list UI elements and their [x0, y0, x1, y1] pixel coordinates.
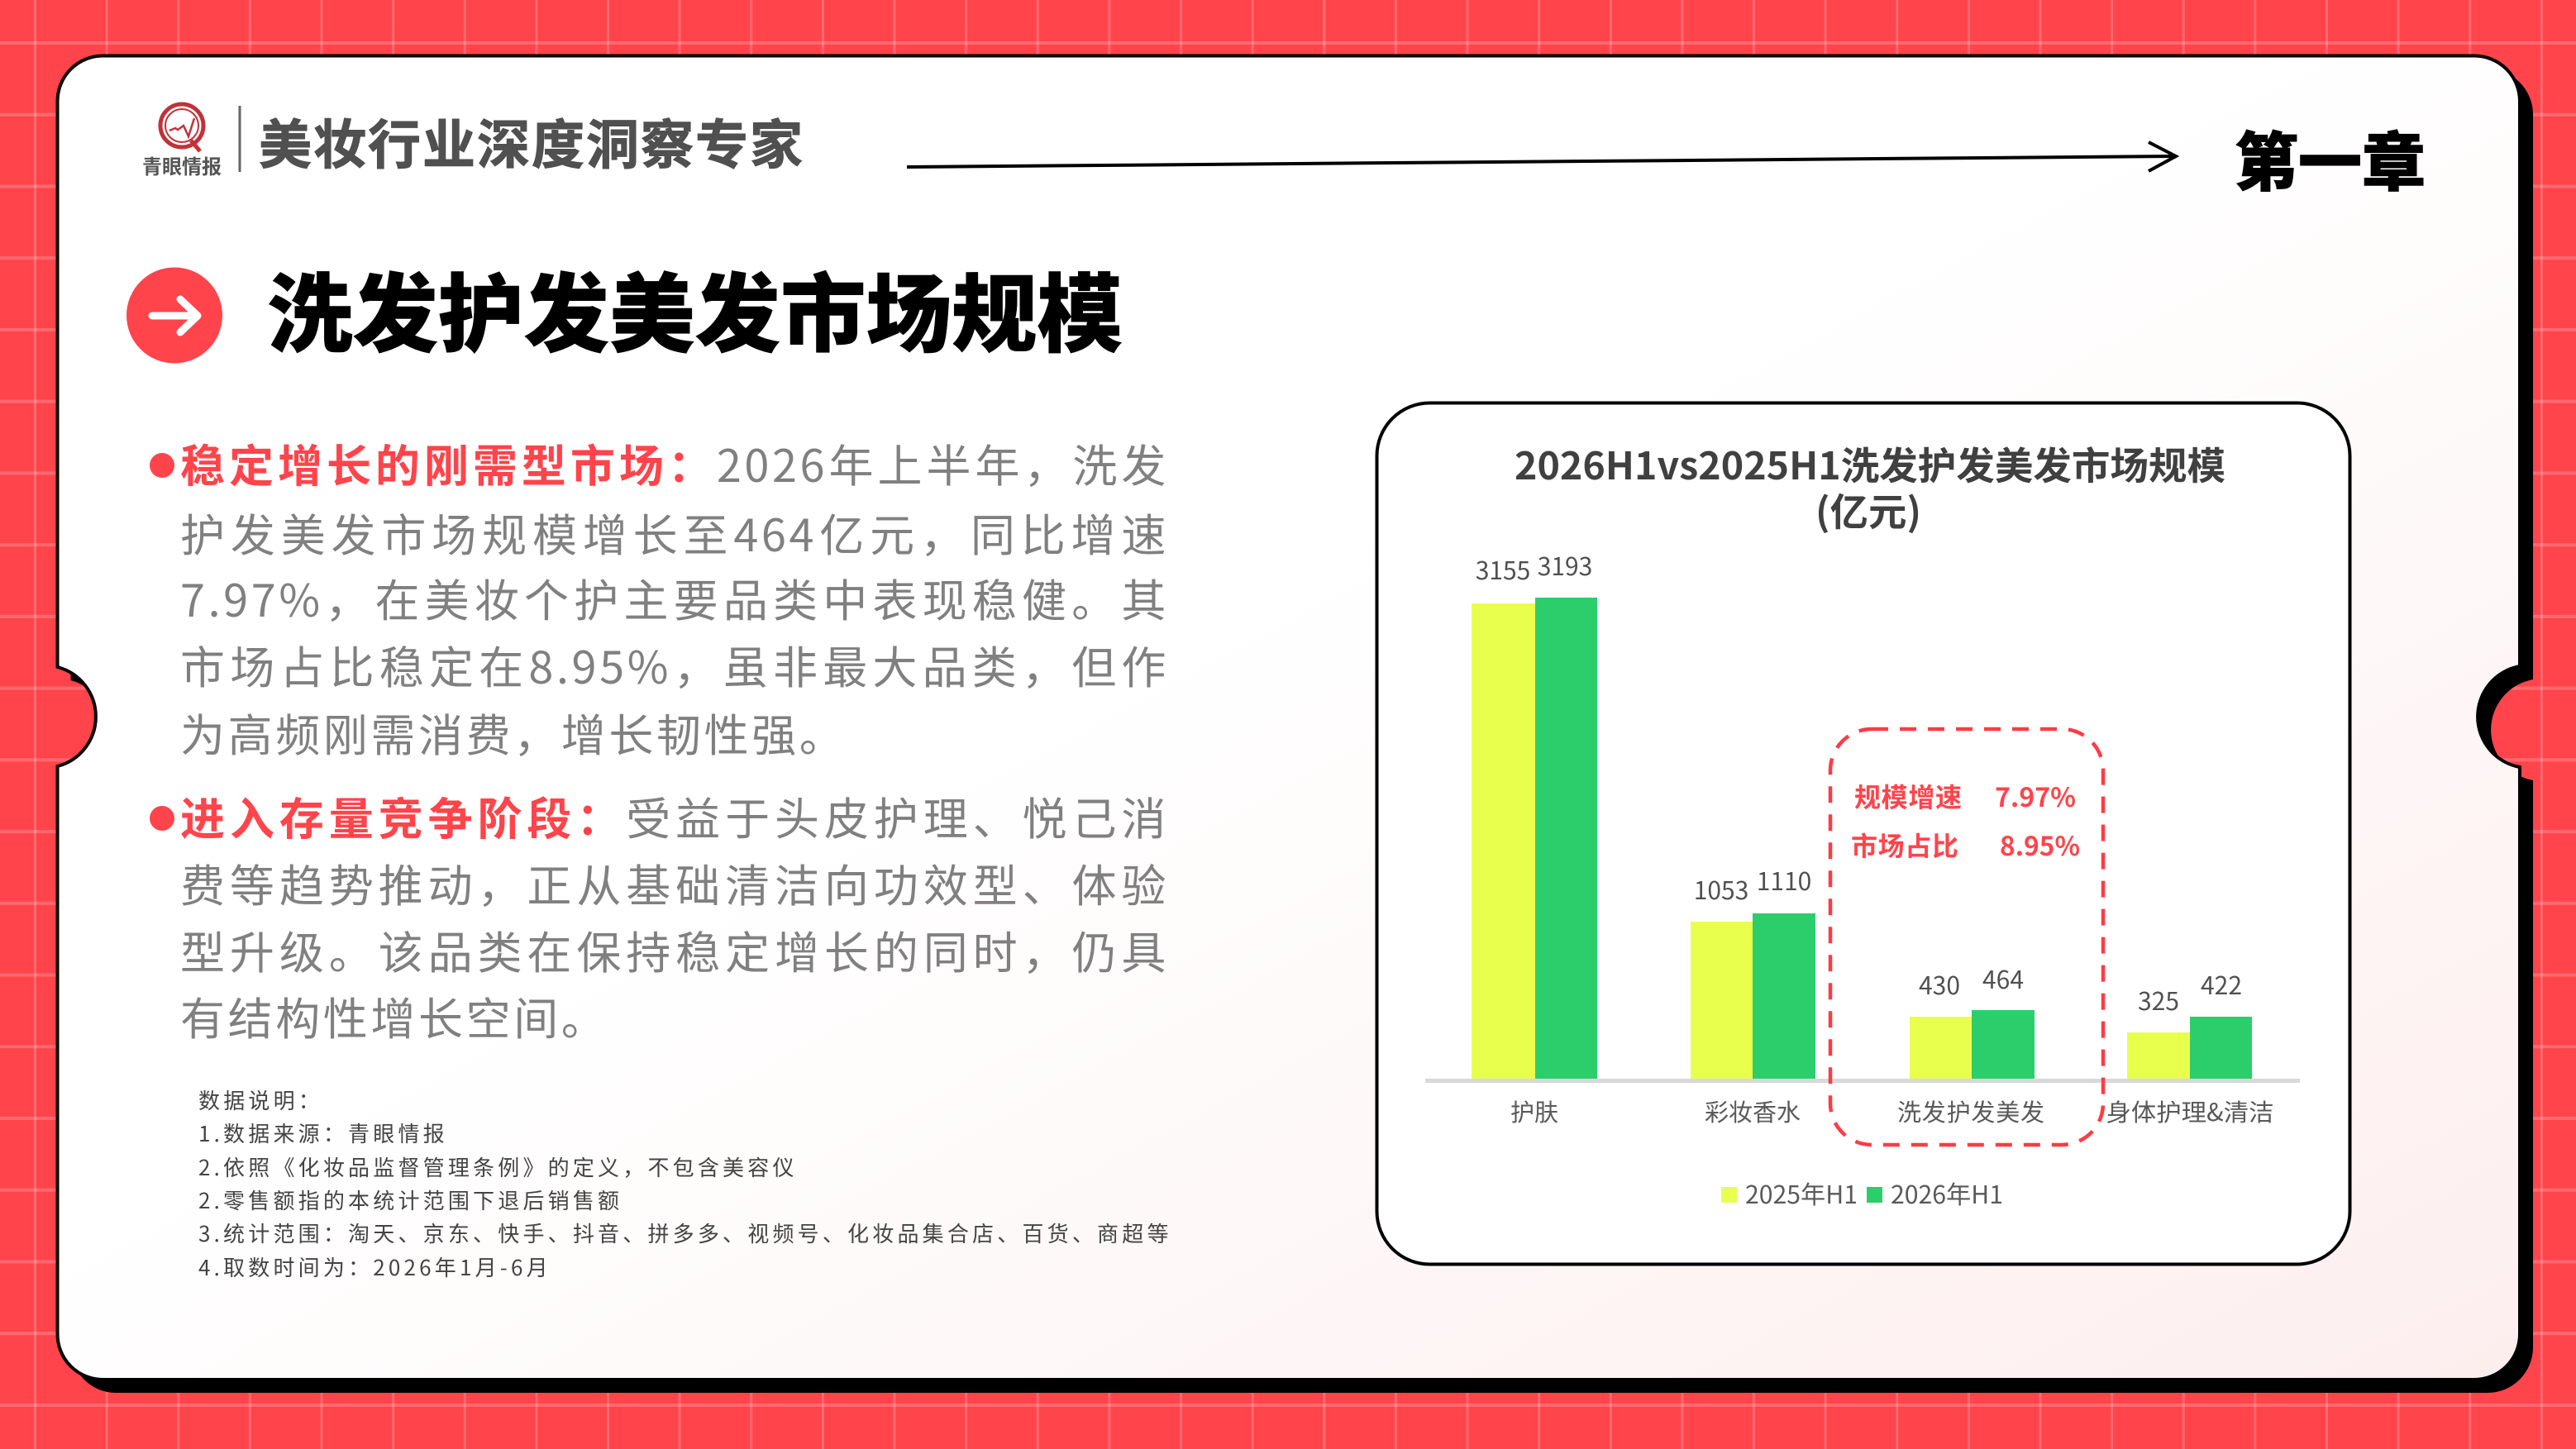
bar chart: [1425, 598, 2300, 1083]
data notes: 数据说明：: [198, 1084, 323, 1115]
bullet: paragraph 2: [150, 806, 174, 831]
callout: highlighted category: 市场占比: [1851, 826, 1958, 864]
chart title: 2026H1vs2025H1洗发护发美发市场规模: [1515, 436, 2225, 491]
chart title: [1515, 436, 2225, 537]
text block: paragraph 1: 为高频刚需消费，增长韧性强。: [180, 699, 847, 765]
data labels: 1110: [1757, 861, 1811, 898]
title: 洗发护发美发市场规模: [267, 245, 1123, 369]
text block: paragraph 2: [180, 783, 1169, 1048]
logo: 青眼情报: [142, 150, 222, 179]
callout: highlighted category: 7.97%: [1995, 777, 2076, 815]
data labels: 3155: [1476, 551, 1530, 587]
data notes: [198, 1084, 1172, 1282]
data notes: 2.依照《化妆品监督管理条例》的定义，不包含美容仪: [198, 1151, 798, 1182]
callout: highlighted category: 8.95%: [2000, 826, 2080, 864]
text block: paragraph 1: 护发美发市场规模增长至464亿元，同比增速: [180, 499, 1169, 565]
data notes: 3.统计范围：淘天、京东、快手、抖音、拼多多、视频号、化妆品集合店、百货、商超等: [198, 1218, 1172, 1248]
chart panel frame: [1377, 403, 2349, 1265]
data labels: 464: [1982, 960, 2024, 996]
chapter label: 第一章: [2235, 112, 2426, 204]
header tagline: 美妆行业深度洞察专家: [259, 103, 804, 179]
data labels: 422: [2201, 965, 2242, 1002]
data labels: 325: [2138, 981, 2179, 1018]
text block: paragraph 1: 稳定增长的刚需型市场：2026年上半年，洗发: [180, 430, 1169, 495]
category labels: 身体护理&清洁: [2106, 1094, 2273, 1128]
data notes: 2.零售额指的本统计范围下退后销售额: [198, 1184, 623, 1215]
category labels: 洗发护发美发: [1897, 1094, 2044, 1128]
callout: highlighted category: 规模增速: [1854, 777, 1962, 815]
category labels: 护肤: [1510, 1094, 1558, 1128]
text block: paragraph 1: [180, 430, 1169, 765]
data labels: [1476, 546, 2242, 1018]
data labels: 430: [1919, 965, 1960, 1002]
data labels: 1053: [1694, 870, 1748, 907]
data notes: 1.数据来源：青眼情报: [198, 1118, 448, 1148]
legend: 2025年H1: [1745, 1175, 1858, 1211]
category labels: [1510, 1094, 2273, 1128]
text block: paragraph 2: 型升级。该品类在保持稳定增长的同时，仍具: [180, 917, 1169, 982]
legend: 2026年H1: [1891, 1175, 2003, 1211]
text block: paragraph 1: 7.97%，在美妆个护主要品类中表现稳健。其: [180, 565, 1169, 630]
chart title: (亿元): [1815, 483, 1921, 537]
data notes: 4.取数时间为：2026年1月-6月: [198, 1251, 551, 1282]
text block: paragraph 1: 市场占比稳定在8.95%，虽非最大品类，但作: [180, 632, 1169, 697]
category labels: 彩妆香水: [1705, 1094, 1801, 1128]
data labels: 3193: [1538, 546, 1592, 583]
text block: paragraph 2: 费等趋势推动，正从基础清洁向功效型、体验: [180, 850, 1169, 915]
text block: paragraph 2: 有结构性增长空间。: [180, 983, 608, 1048]
legend: [1721, 1175, 2003, 1211]
text block: paragraph 2: 进入存量竞争阶段：受益于头皮护理、悦己消: [180, 783, 1169, 848]
callout: highlighted category: [1830, 729, 2103, 1145]
bullet: paragraph 1: [150, 453, 174, 478]
